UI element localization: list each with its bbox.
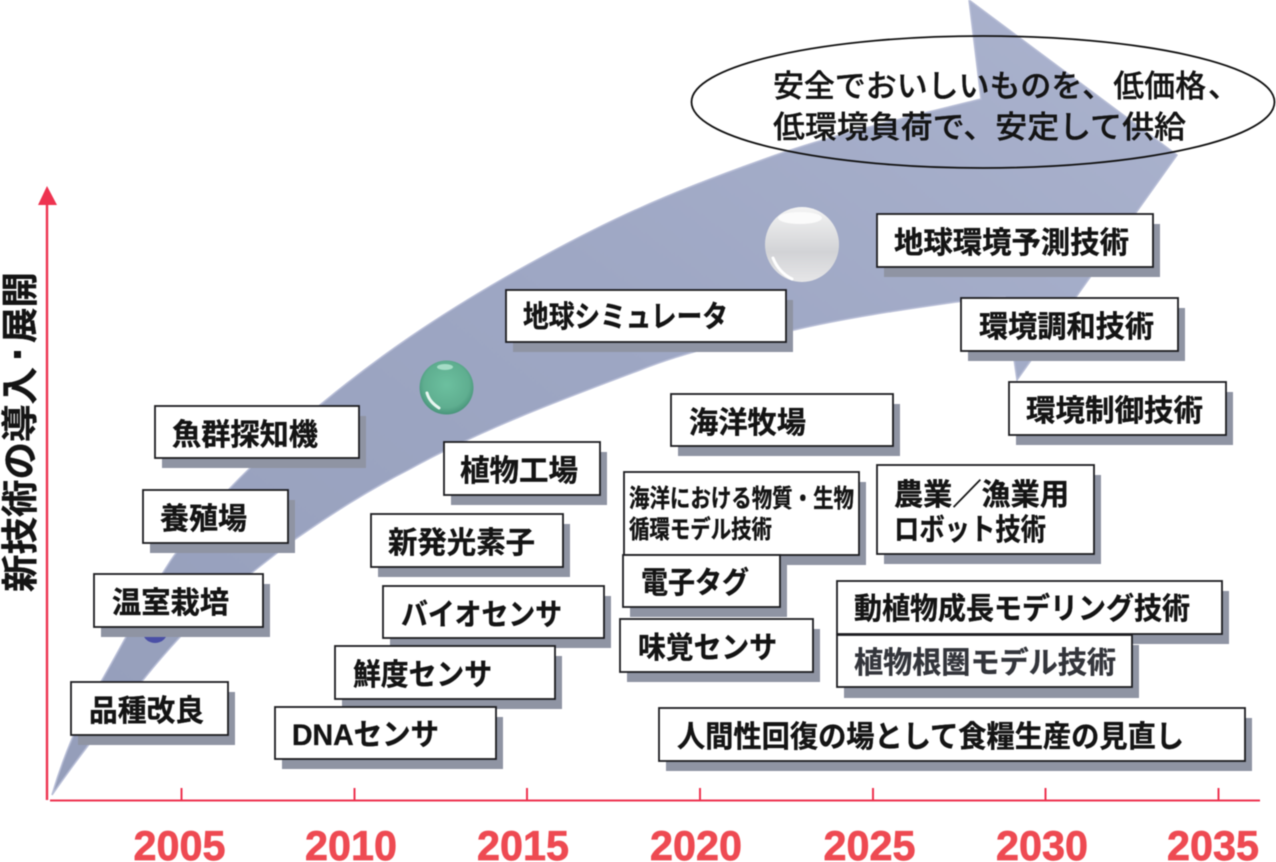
icon: green sphere (420, 360, 474, 414)
box: 魚群探知機 (155, 406, 366, 468)
box: バイオセンサ (383, 586, 611, 648)
box: 海洋における物質・生物循環モデル技術 (624, 472, 866, 565)
box: DNAセンサ: DNAセンサ (292, 719, 439, 752)
box: 人間性回復の場として食糧生産の見直し: 人間性回復の場として食糧生産の見直し (677, 721, 1184, 754)
year labels (134, 822, 1259, 862)
box: 動植物成長モデリング技術 (837, 581, 1229, 644)
box: 海洋牧場 (671, 394, 900, 456)
box: 海洋における物質・生物循環モデル技術: 海洋における物質・生物 (629, 485, 854, 513)
box: 地球シミュレータ: 地球シミュレータ (523, 301, 728, 334)
box: 養殖場: 養殖場 (160, 503, 247, 536)
box: 農業／漁業用ロボット技術 (877, 465, 1101, 564)
horizontal axis with ticks (50, 788, 1260, 800)
box: 電子タグ: 電子タグ (641, 567, 749, 600)
box: 植物根圏モデル技術: 植物根圏モデル技術 (854, 646, 1116, 680)
box: 人間性回復の場として食糧生産の見直し (659, 708, 1252, 771)
box: 植物工場 (444, 442, 607, 505)
box: 電子タグ (623, 555, 787, 617)
box: 地球シミュレータ (506, 290, 793, 352)
box: DNAセンサ (275, 707, 503, 769)
box: 環境調和技術 (961, 298, 1185, 361)
box: 環境調和技術: 環境調和技術 (979, 311, 1154, 344)
box: 新発光素子: 新発光素子 (388, 527, 535, 560)
box: 海洋における物質・生物循環モデル技術: 循環モデル技術 (629, 515, 772, 544)
box: 地球環境予測技術: 地球環境予測技術 (894, 227, 1129, 260)
box: 味覚センサ (620, 619, 820, 682)
box: 品種改良: 品種改良 (89, 695, 204, 728)
box: 環境制御技術: 環境制御技術 (1026, 395, 1203, 428)
box: 品種改良 (71, 682, 235, 745)
box: 味覚センサ: 味覚センサ (638, 632, 777, 665)
icon: blue sphere (142, 617, 168, 643)
box: 植物根圏モデル技術 (837, 635, 1139, 698)
goal ellipse callout: 、 (1208, 69, 1239, 104)
y-axis title: 新技術の導入 (0, 367, 41, 592)
goal ellipse callout (692, 36, 1274, 168)
box: 鮮度センサ: 鮮度センサ (353, 659, 492, 692)
box: 植物工場: 植物工場 (460, 455, 578, 488)
box: 鮮度センサ (335, 646, 562, 709)
box: 地球環境予測技術 (877, 214, 1160, 277)
box: 農業／漁業用ロボット技術: ロボット技術 (894, 514, 1046, 547)
box: 環境制御技術 (1009, 382, 1233, 445)
box: 魚群探知機: 魚群探知機 (172, 419, 318, 452)
goal ellipse callout: 低環境負荷で、安定して供給 (773, 110, 1186, 145)
vertical axis (38, 186, 57, 800)
y-axis title: 展開 (0, 272, 41, 343)
box: 新発光素子 (371, 514, 570, 577)
y-axis title (0, 272, 41, 592)
box: バイオセンサ: バイオセンサ (401, 599, 562, 632)
icon: white sphere (765, 207, 839, 282)
goal ellipse callout: 安全でおいしいものを、低価格 (773, 69, 1206, 104)
box: 養殖場 (143, 490, 295, 553)
box: 農業／漁業用ロボット技術: 農業／漁業用 (894, 479, 1069, 512)
box: 海洋牧場: 海洋牧場 (689, 407, 806, 440)
box: 温室栽培: 温室栽培 (112, 587, 229, 620)
box: 動植物成長モデリング技術: 動植物成長モデリング技術 (854, 592, 1190, 626)
box: 温室栽培 (94, 574, 270, 637)
